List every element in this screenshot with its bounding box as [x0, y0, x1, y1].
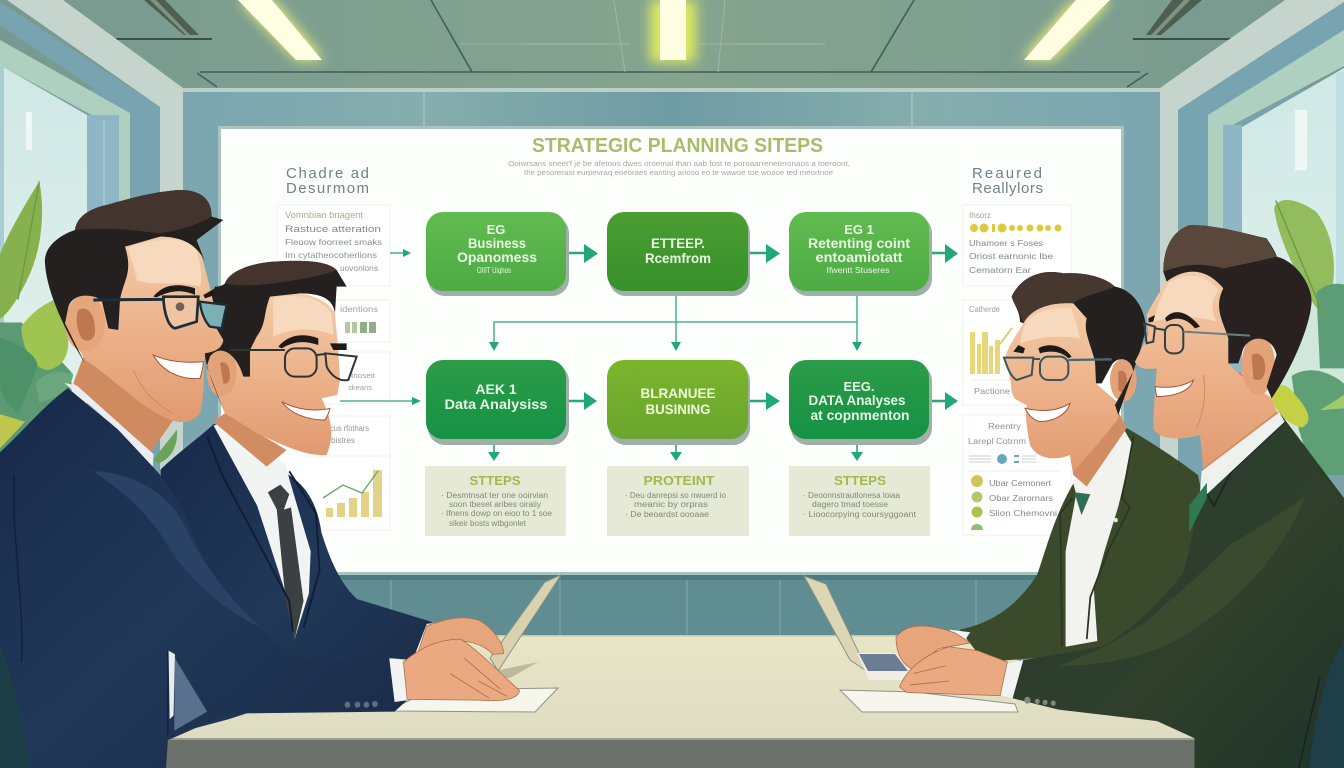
suit and hand	[900, 412, 1344, 768]
left column heading: Chadre ad	[286, 165, 369, 182]
left column heading	[286, 165, 369, 197]
glass	[0, 65, 87, 470]
process box: business	[426, 212, 569, 296]
left column card 1: Rastuce atteration	[285, 224, 381, 235]
person: far right	[900, 225, 1344, 768]
right papers	[840, 690, 1018, 712]
glass	[1242, 68, 1344, 470]
left column card 3	[277, 352, 390, 404]
neck	[1203, 372, 1280, 472]
process box: business: EG	[487, 222, 505, 237]
person: far left	[0, 190, 520, 768]
process box: retenting: Retenting coint	[808, 236, 911, 251]
process box: reform: Rcemfrom	[645, 251, 711, 266]
screen subtitle: the pesorerast eurpevraq eoeoraes eanting arioso eo te wawoe toe woaoe ted meortnoe	[524, 170, 833, 177]
person: second left	[161, 261, 504, 734]
process box: business branch	[607, 360, 750, 445]
step note: protein: · De beoardst oooaae	[625, 510, 710, 519]
process box: business: Opanomess	[457, 250, 537, 265]
right column heading: Reaured	[972, 165, 1042, 182]
step note: steps two: · Deoonnstrautlonesa loiaa	[803, 491, 901, 500]
left column card 4: cus rfothars	[330, 424, 369, 433]
person: second right	[896, 272, 1214, 670]
screen title: STRATEGIC PLANNING SITEPS	[532, 135, 823, 157]
right column card 3 with list: Ubar Cemonert	[989, 478, 1052, 488]
light beam and column	[7, 0, 183, 470]
arrows: row two	[566, 392, 958, 410]
presentation screen	[218, 126, 1124, 575]
process box: data analyses	[789, 360, 932, 445]
head	[1135, 225, 1312, 468]
right plant	[1270, 200, 1344, 475]
left column card 3: tnoseit	[351, 371, 376, 380]
light beam and column	[1160, 0, 1344, 470]
process box: retenting: Ifwentt Stuseres	[826, 266, 890, 275]
left laptop	[480, 575, 561, 678]
right window	[1160, 0, 1344, 470]
process box: data analyses: EEG.	[843, 379, 875, 394]
left column card 1	[277, 205, 390, 286]
process box: data analysis	[426, 360, 569, 445]
arrows: row one	[566, 244, 958, 263]
arrow: left input row one	[390, 249, 411, 257]
process box: data analysis: AEK 1	[475, 381, 517, 397]
suit and hand	[161, 424, 504, 734]
left column card 1: Im cytatheocoherlions	[285, 250, 377, 260]
arrows: down to step notes	[488, 440, 863, 461]
left column card 2	[277, 300, 390, 342]
back wall	[183, 88, 1161, 638]
step note: protein: PROTEINT	[644, 473, 715, 488]
screen subtitle	[508, 161, 850, 177]
mint frame	[1208, 30, 1344, 470]
step note: protein	[607, 466, 749, 536]
left column heading: Desurmom	[286, 180, 369, 197]
blue frame	[1223, 125, 1242, 470]
head	[1004, 272, 1146, 487]
right column card 3 with list	[963, 415, 1071, 535]
left column card 1: Fleoow foorreet smaks	[285, 237, 382, 247]
process box: data analyses: at copnmenton	[810, 407, 910, 423]
step note: steps two: · Lioocorpying coursyggoant	[803, 510, 917, 519]
right column card 2 with chart: Catherde	[969, 305, 1001, 314]
head	[45, 190, 227, 422]
blue band and column	[0, 2, 160, 470]
rating glyphs	[970, 224, 1062, 232]
right column card 1	[963, 205, 1071, 286]
left window	[0, 0, 183, 470]
arrows: branching connector	[489, 291, 862, 351]
left column card 2: identions	[340, 305, 378, 314]
conference table	[166, 635, 1195, 768]
process box: reform: ETTEEP.	[651, 236, 705, 251]
ceiling	[0, 0, 1344, 90]
step note: steps two: dagero tmad toesse	[812, 500, 889, 509]
process box: business branch: BLRANUEE	[640, 385, 716, 401]
suit and hand	[896, 427, 1214, 670]
process box: retenting: entoamiotatt	[816, 250, 903, 265]
process box: business: Business	[468, 236, 526, 251]
left column card 4: bistres	[331, 436, 355, 445]
right column card 1: Oriost earnonic Ibe	[969, 251, 1053, 261]
right column card 1: Uhamoer s Foses	[969, 238, 1043, 248]
bar chart	[323, 470, 382, 517]
right column card 3 with list: Obar Zarornars	[989, 493, 1053, 503]
process box: reform	[607, 212, 750, 296]
left column card 1: uovonlons	[340, 263, 378, 273]
right column card 3 with list: Larepl Cotrnm	[968, 436, 1026, 446]
step note: steps two: STTEPS	[834, 473, 886, 488]
left column card 3: skeans	[348, 383, 372, 392]
step note: steps one: sikeir bosts wtbgonlet	[449, 519, 527, 528]
right laptop	[804, 576, 914, 680]
blue band and column	[1178, 2, 1344, 470]
process box: data analyses: DATA Analyses	[808, 392, 906, 408]
right column card 1: Ihsorz	[969, 211, 991, 220]
suit and hand	[0, 383, 520, 768]
process box: business: OIIIT Uiqhos	[477, 266, 511, 275]
step note: steps two	[789, 466, 930, 536]
neck	[73, 357, 173, 453]
process box: retenting	[789, 212, 932, 296]
left papers	[394, 688, 558, 712]
right column heading: Reallylors	[972, 180, 1043, 197]
step note: steps one	[425, 466, 566, 536]
process box: data analysis: Data Analysiss	[444, 396, 548, 412]
step note: protein: · Deu danrepsi so nwuerd io	[625, 491, 727, 500]
arrow: left input row two	[340, 397, 421, 405]
step note: protein: meanic by orpras	[634, 500, 708, 509]
process box: business branch: BUSINING	[646, 401, 711, 417]
light fixtures	[238, 0, 1112, 62]
right column card 2 with chart: Pactione	[974, 387, 1011, 396]
left column card 1: Vomnbian bnagent	[285, 210, 364, 220]
screen subtitle: Ooiwrsans sneet'f je be afetous dwes oroemal than aab fost te poroaarreneteronaos a toeroont,	[508, 161, 850, 168]
right column card 3 with list: Reentry	[988, 421, 1022, 431]
left chair	[0, 645, 30, 768]
step note: steps one: STTEPS	[470, 473, 521, 488]
left column card 4	[277, 416, 390, 530]
step note: steps one: soon tbeset aribes oiraiiy	[449, 500, 541, 509]
process box: retenting: EG 1	[844, 222, 874, 237]
flowchart connectors	[340, 244, 958, 461]
step note: steps one: · Ifnens dowp on eioo to 1 soe	[441, 509, 553, 518]
blue frame	[87, 115, 119, 470]
right column card 3 with list: Slion Chemovni	[989, 508, 1057, 518]
head	[205, 261, 357, 467]
right column heading	[972, 165, 1043, 197]
mint frame	[0, 40, 130, 470]
left plant	[0, 181, 177, 681]
ceiling vents	[116, 0, 1232, 39]
right column card 1: Cematorn Ear	[969, 265, 1031, 275]
step note: steps one: · Desmtnsat ter one ooirvian	[441, 491, 548, 500]
right column card 2 with chart	[963, 300, 1071, 405]
